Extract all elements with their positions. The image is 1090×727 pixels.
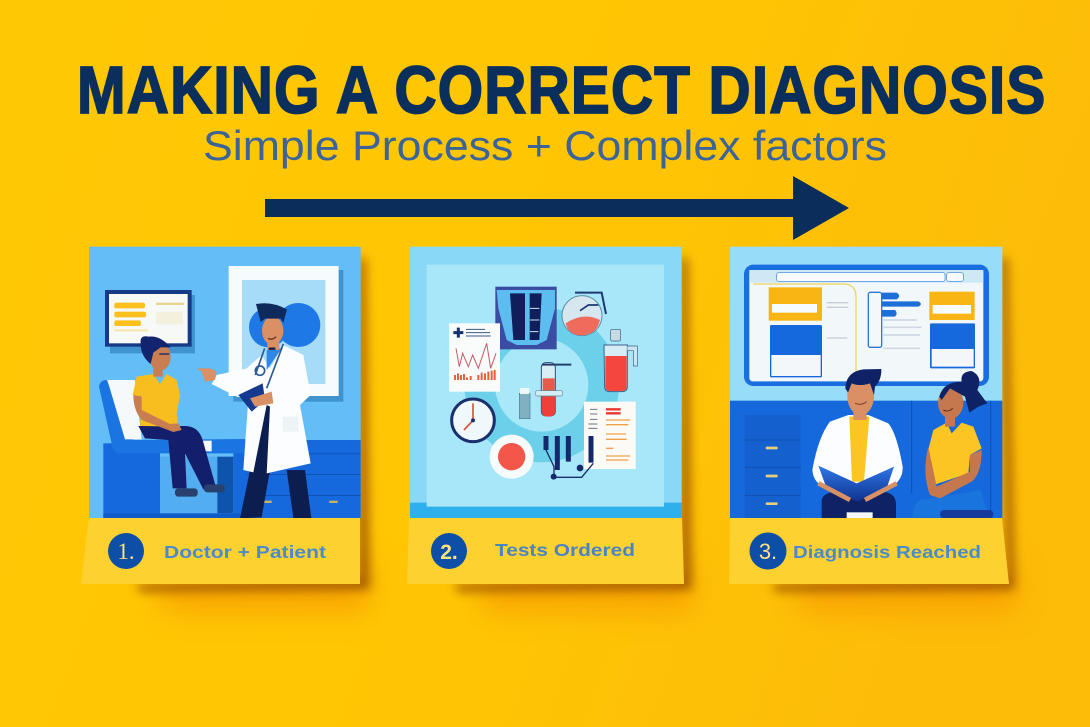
caption 1 <box>81 518 360 584</box>
icon: jug <box>604 329 637 392</box>
caption 1: 1. <box>117 539 135 564</box>
illustration 3 <box>730 247 1002 518</box>
panel 3: diagnosis reached <box>729 247 1016 612</box>
icon: x-ray <box>495 287 557 349</box>
icon: red button <box>490 435 534 479</box>
icon: wall chart <box>105 290 192 347</box>
panel 2: tests ordered <box>407 247 692 612</box>
icon: lab report <box>584 402 636 469</box>
icon: instruments <box>546 436 593 480</box>
caption 1: Doctor + Patient <box>164 542 326 562</box>
caption 3: 3. <box>759 539 777 564</box>
icon: cabinets <box>237 440 361 518</box>
icon: flask <box>562 293 606 336</box>
illustration 2 <box>410 247 682 518</box>
icon: doctor seated <box>812 369 903 518</box>
caption 2: 2. <box>440 541 458 564</box>
illustration 1 <box>89 247 361 518</box>
icon: chart report <box>449 323 500 392</box>
icon: doctor <box>197 303 311 518</box>
title: MAKING A CORRECT DIAGNOSIS <box>77 53 1045 128</box>
arrow <box>265 176 849 240</box>
caption 2: Tests Ordered <box>495 540 635 560</box>
icon: framed picture <box>229 266 339 396</box>
icon: exam table <box>99 380 247 518</box>
icon: patient seated <box>913 371 993 518</box>
subtitle: Simple Process + Complex factors <box>203 122 887 169</box>
caption 3: Diagnosis Reached <box>793 542 981 562</box>
icon: drawers <box>745 401 991 518</box>
icon: monitor <box>744 265 989 386</box>
icon: clock <box>452 399 494 442</box>
caption 2 <box>407 518 684 584</box>
caption 3 <box>729 518 1009 584</box>
icon: test tube stand <box>535 363 571 417</box>
icon: small bottle <box>519 388 530 419</box>
panel 1: doctor and patient <box>81 247 370 612</box>
icon: patient <box>133 336 225 497</box>
